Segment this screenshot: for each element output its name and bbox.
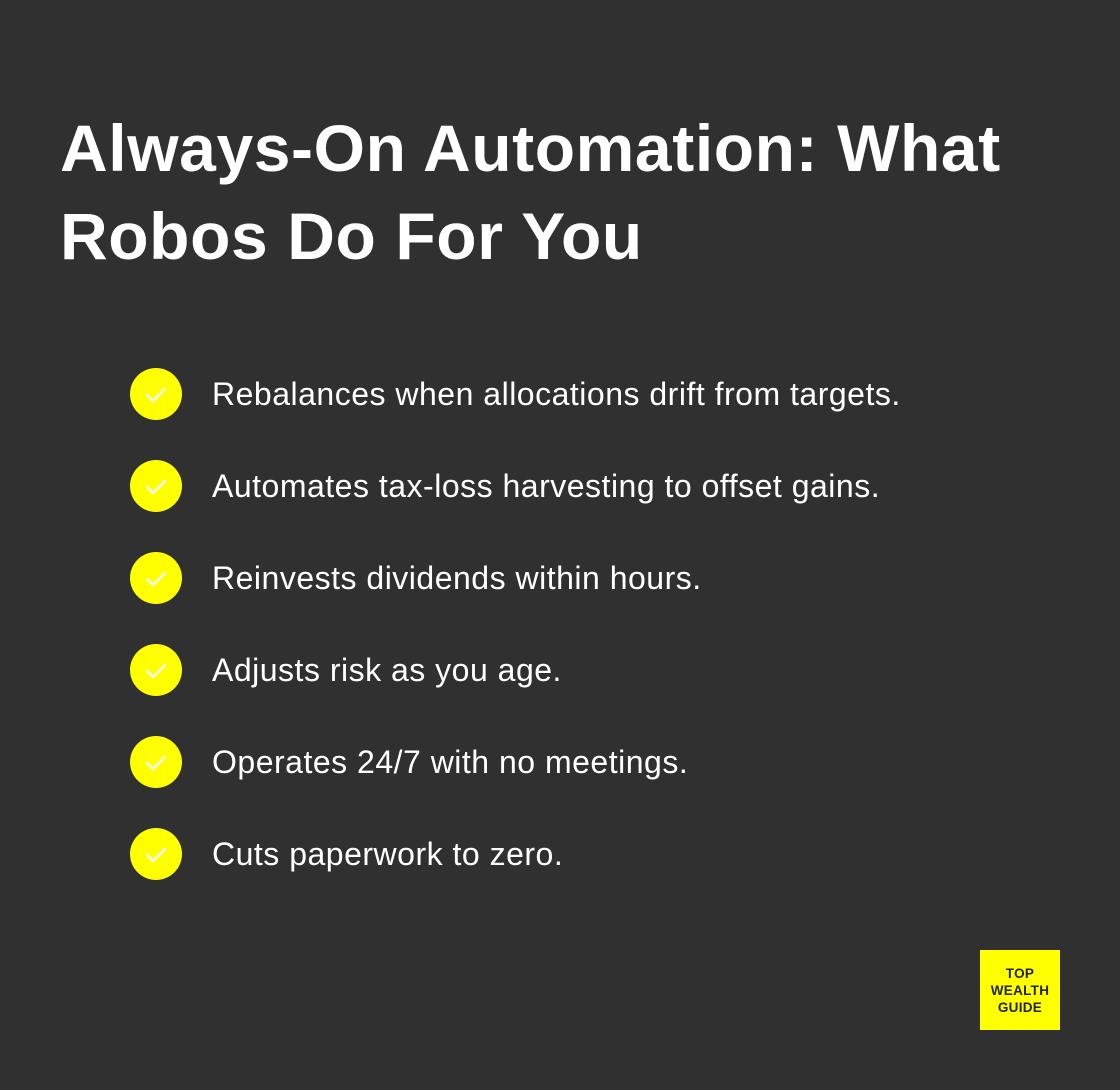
logo: TOP <box>1006 966 1034 980</box>
title: Always-On Automation: What <box>60 111 1001 185</box>
item 6: Cuts paperwork to zero. <box>212 836 563 872</box>
logo: GUIDE <box>998 1000 1042 1014</box>
item 1 <box>130 368 901 420</box>
item 1: Rebalances when allocations drift from targets. <box>212 376 901 412</box>
icon: check <box>130 460 182 512</box>
logo: WEALTH <box>991 982 1049 998</box>
item 3 <box>130 552 702 604</box>
item 2: Automates tax-loss harvesting to offset gains. <box>212 468 880 504</box>
title: Robos Do For You <box>60 199 643 273</box>
icon: check <box>130 644 182 696</box>
icon: check <box>130 736 182 788</box>
logo <box>980 950 1060 1030</box>
icon: check <box>130 552 182 604</box>
icon: check <box>130 368 182 420</box>
item 6 <box>130 828 563 880</box>
item 3: Reinvests dividends within hours. <box>212 560 702 596</box>
item 4 <box>130 644 562 696</box>
item 4: Adjusts risk as you age. <box>212 652 562 688</box>
icon: check <box>130 828 182 880</box>
title <box>60 111 1001 273</box>
item 5: Operates 24/7 with no meetings. <box>212 744 688 780</box>
item 5 <box>130 736 688 788</box>
item 2 <box>130 460 880 512</box>
